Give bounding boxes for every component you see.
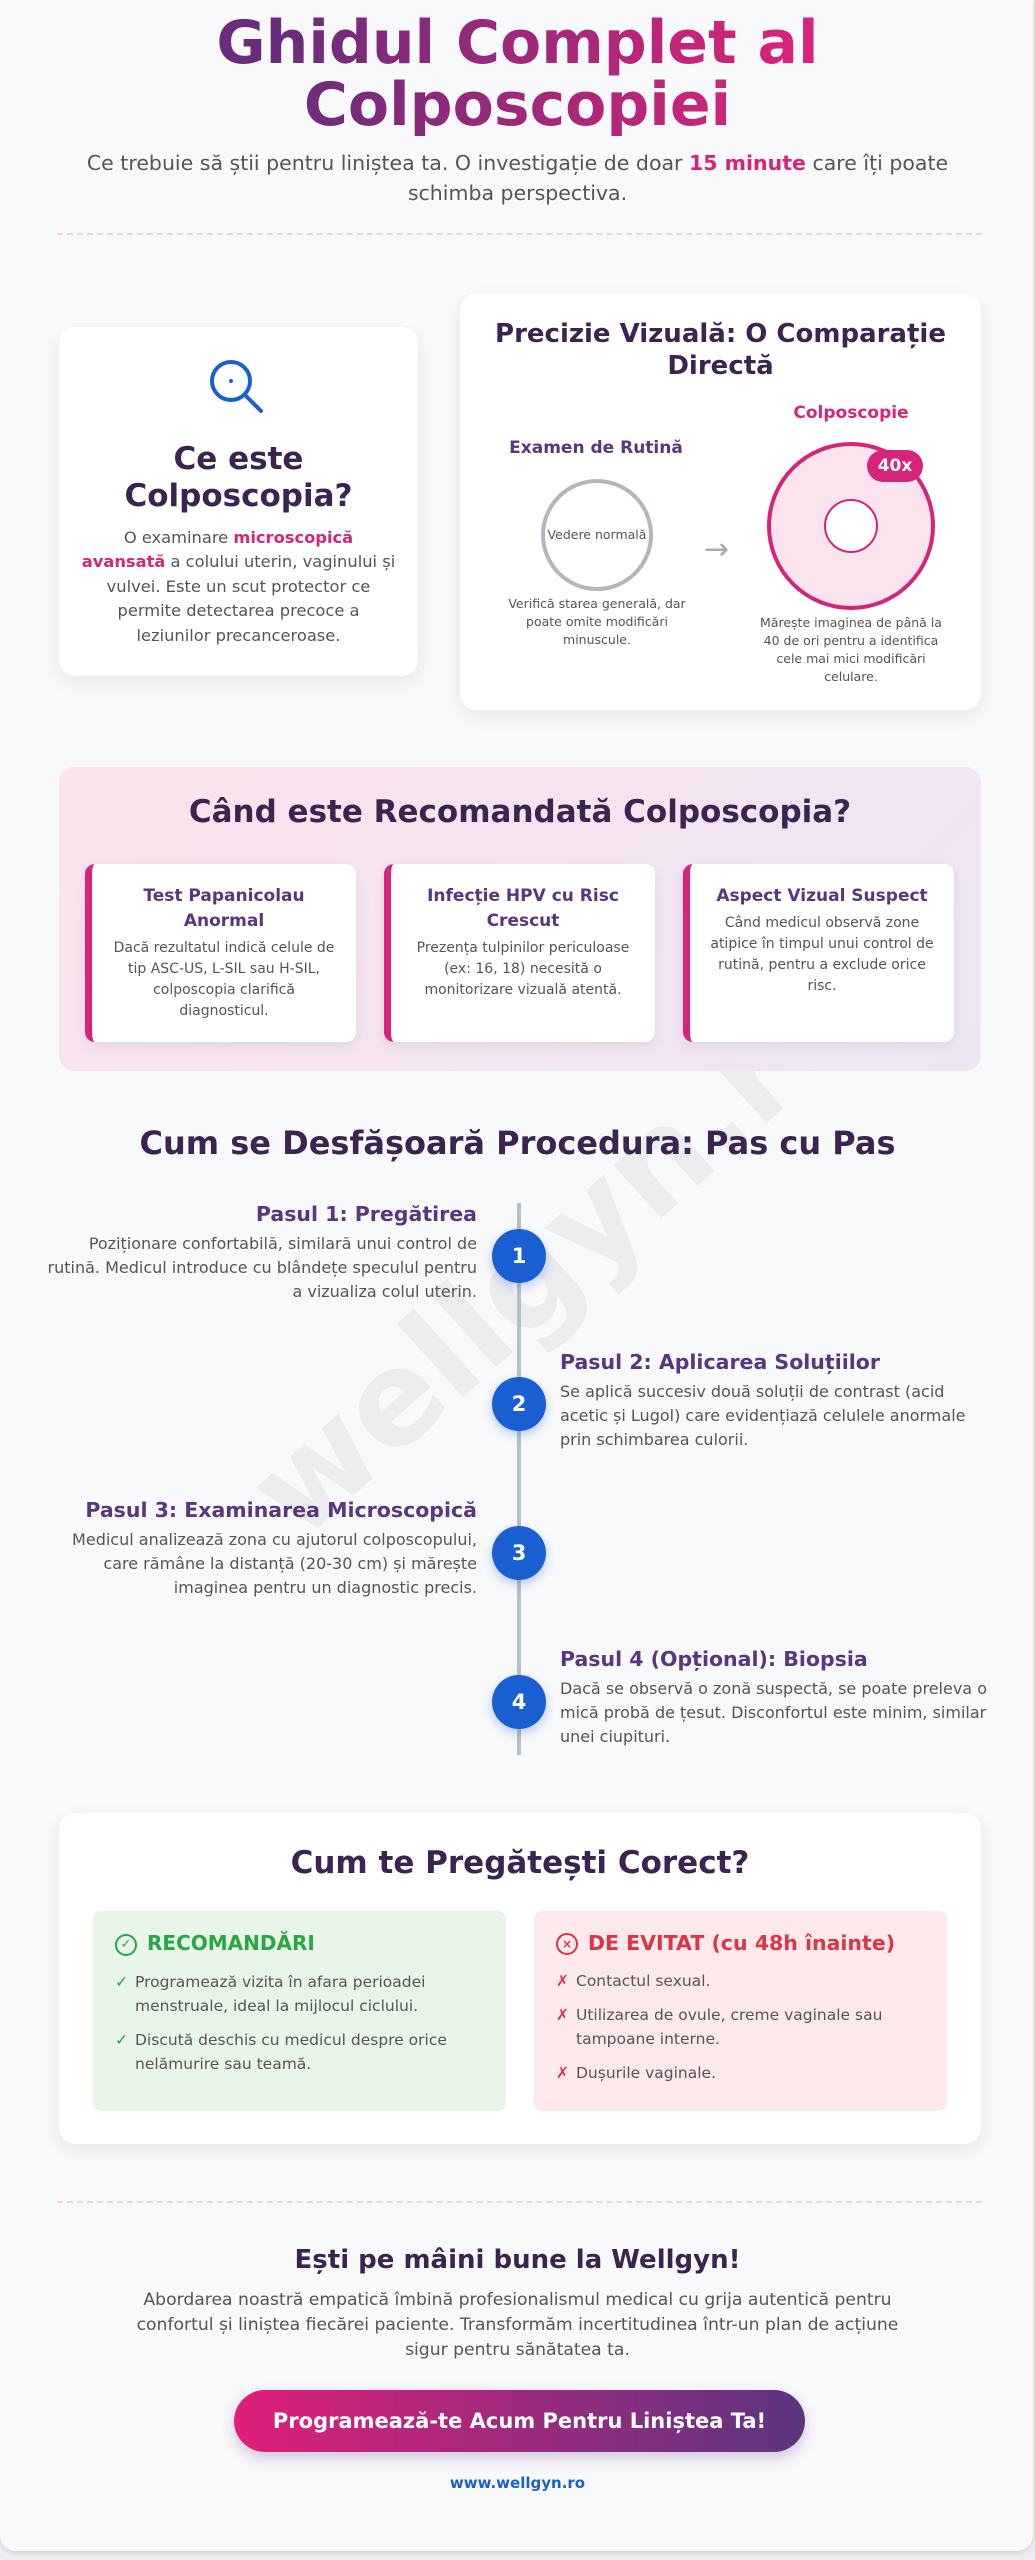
- heading: [124, 441, 352, 514]
- heading: Cum te Pregătești Corect?: [291, 1845, 749, 1881]
- box: recommendations: Discută deschis cu medicul despre orice nelămurire sau teamă.: [135, 2031, 447, 2073]
- box: recommendations: Programează vizita în afara perioadei menstruale, ideal la mijlocul ciclului.: [135, 1973, 425, 2015]
- label: routine: Examen de Rutină: [509, 438, 683, 458]
- panel: when recommended: [59, 767, 981, 1071]
- step 3: Pasul 3: Examinarea Microscopică: [85, 1498, 477, 1522]
- step 4: Dacă se observă o zonă suspectă, se poate preleva o: [560, 1679, 987, 1698]
- box: avoid: Utilizarea de ovule, creme vaginale sau tampoane interne.: [576, 2006, 882, 2048]
- icon: step 2: [492, 1377, 546, 1431]
- subtitle: Ce trebuie să știi pentru liniștea ta. O investigație de doar 15 minute care îți poate schimba perspectiva.: [87, 151, 948, 205]
- step 2: acetic și Lugol) care evidențiază celulele anormale: [560, 1406, 965, 1425]
- watermark: wellgyn.ro: [219, 938, 893, 1567]
- step 2: Pasul 2: Aplicarea Soluțiilor: [560, 1350, 880, 1374]
- heading: Ce este: [174, 441, 303, 477]
- icon: step 2: 2: [512, 1392, 526, 1416]
- box: avoid: ✗: [556, 2006, 569, 2024]
- heading: Colposcopia?: [124, 478, 352, 514]
- title: Ghidul Complet al: [216, 8, 819, 78]
- box: avoid: ✗: [556, 1972, 569, 1990]
- step 1: Pasul 1: Pregătirea: [256, 1202, 477, 1226]
- box: avoid: ×: [562, 1937, 572, 1951]
- icon: normal view circle: [541, 479, 653, 591]
- card: suspect aspect: [683, 864, 954, 1042]
- panel: what is colposcopy: [59, 327, 418, 676]
- panel: preparation: [59, 1813, 981, 2144]
- heading: Când este Recomandată Colposcopia?: [189, 794, 851, 830]
- heading: Directă: [667, 351, 774, 381]
- icon: normal view circle: Vedere normală: [548, 527, 646, 542]
- card: pap test: [85, 864, 356, 1042]
- button: CTA: [234, 2390, 805, 2452]
- box: recommendations: [93, 1911, 506, 2111]
- text: colposcopy desc: Mărește imaginea de până la 40 de ori pentru a identifica cele mai mici modificări celulare.: [760, 615, 942, 684]
- card: suspect aspect: Când medicul observă zone atipice în timpul unui control de rutină, pentru a exclude orice risc.: [710, 915, 934, 994]
- icon: step 4: [492, 1675, 546, 1729]
- icon: step 1: 1: [512, 1244, 526, 1268]
- step 1: [48, 1202, 477, 1301]
- badge: 40x: 40x: [878, 456, 912, 476]
- heading: Precizie Vizuală: O Comparație: [495, 319, 946, 349]
- badge: 40x: [867, 450, 923, 482]
- title: Colposcopiei: [304, 70, 731, 140]
- heading: procedure: Cum se Desfășoară Procedura: Pas cu Pas: [140, 1124, 896, 1162]
- icon: step 3: 3: [512, 1541, 526, 1565]
- box: recommendations: RECOMANDĂRI: [147, 1931, 315, 1955]
- label: colposcopy: Colposcopie: [793, 403, 909, 423]
- step 4: mică probă de țesut. Disconfortul este minim, similar: [560, 1703, 986, 1722]
- arrow: →: [704, 532, 729, 567]
- button: CTA: Programează-te Acum Pentru Liniștea Ta!: [273, 2409, 766, 2433]
- step 4: Pasul 4 (Opțional): Biopsia: [560, 1647, 868, 1671]
- card: pap test: Dacă rezultatul indică celule de tip ASC-US, L-SIL sau H-SIL, colposcopia clarifică diagnosticul.: [114, 940, 334, 1019]
- footer heading: Ești pe mâini bune la Wellgyn!: [295, 2245, 740, 2275]
- box: recommendations: ✓: [121, 1937, 131, 1952]
- box: avoid: Contactul sexual.: [576, 1972, 710, 1990]
- text: avansată a colului uterin, vaginului și: [82, 552, 395, 571]
- box: avoid: Dușurile vaginale.: [576, 2064, 716, 2082]
- text: permite detectarea precoce a: [117, 601, 360, 620]
- step 2: [560, 1350, 965, 1449]
- text: routine desc: Verifică starea generală, dar poate omite modificări minuscule.: [508, 596, 686, 647]
- box: recommendations: ✓: [115, 2031, 128, 2049]
- box: recommendations: ✓: [115, 1973, 128, 1991]
- step 2: prin schimbarea culorii.: [560, 1430, 748, 1449]
- icon: magnifier: [210, 360, 264, 414]
- icon: step 4: 4: [512, 1690, 526, 1714]
- step 3: imaginea pentru un diagnostic precis.: [174, 1578, 477, 1597]
- icon: magnified circle: [767, 442, 935, 610]
- card: HPV: [384, 864, 655, 1042]
- step 1: Poziționare confortabilă, similară unui control de: [89, 1234, 477, 1253]
- footer text: Abordarea noastră empatică îmbină profesionalismul medical cu grija autentică pentru confortul și liniștea fiecărei paciente. Transformăm incertitudinea într-un plan de acțiune sigur pentru sănătatea ta.: [137, 2290, 898, 2360]
- step 2: Se aplică succesiv două soluții de contrast (acid: [560, 1382, 944, 1401]
- box: avoid: DE EVITAT (cu 48h înainte): [588, 1931, 895, 1955]
- text: leziunilor precanceroase.: [136, 626, 340, 645]
- icon: step 1: [492, 1229, 546, 1283]
- step 1: a vizualiza colul uterin.: [292, 1282, 477, 1301]
- card: pap test: Test Papanicolau Anormal: [143, 886, 305, 931]
- step 4: [560, 1647, 987, 1746]
- card: HPV: Infecție HPV cu Risc Crescut: [427, 886, 619, 931]
- title: [0, 12, 1035, 136]
- text: O examinare microscopică: [124, 528, 353, 547]
- icon: step 3: [492, 1526, 546, 1580]
- link: website: www.wellgyn.ro: [450, 2474, 585, 2492]
- step 3: [72, 1498, 477, 1597]
- step 3: Medicul analizează zona cu ajutorul colposcopului,: [72, 1530, 477, 1549]
- step 3: care rămâne la distanță (20-30 cm) și mărește: [103, 1554, 477, 1573]
- box: avoid: [534, 1911, 947, 2111]
- text: vulvei. Este un scut protector ce: [107, 577, 370, 596]
- card: HPV: Prezența tulpinilor periculoase (ex: 16, 18) necesită o monitorizare vizuală atentă.: [417, 940, 629, 998]
- card: suspect aspect: Aspect Vizual Suspect: [716, 886, 928, 906]
- panel: visual comparison: [460, 294, 981, 710]
- heading: [495, 319, 946, 381]
- text: [82, 528, 395, 645]
- step 1: rutină. Medicul introduce cu blândețe speculul pentru: [48, 1258, 477, 1277]
- timeline line: [517, 1203, 521, 1755]
- step 4: unei ciupituri.: [560, 1727, 670, 1746]
- box: avoid: ✗: [556, 2064, 569, 2082]
